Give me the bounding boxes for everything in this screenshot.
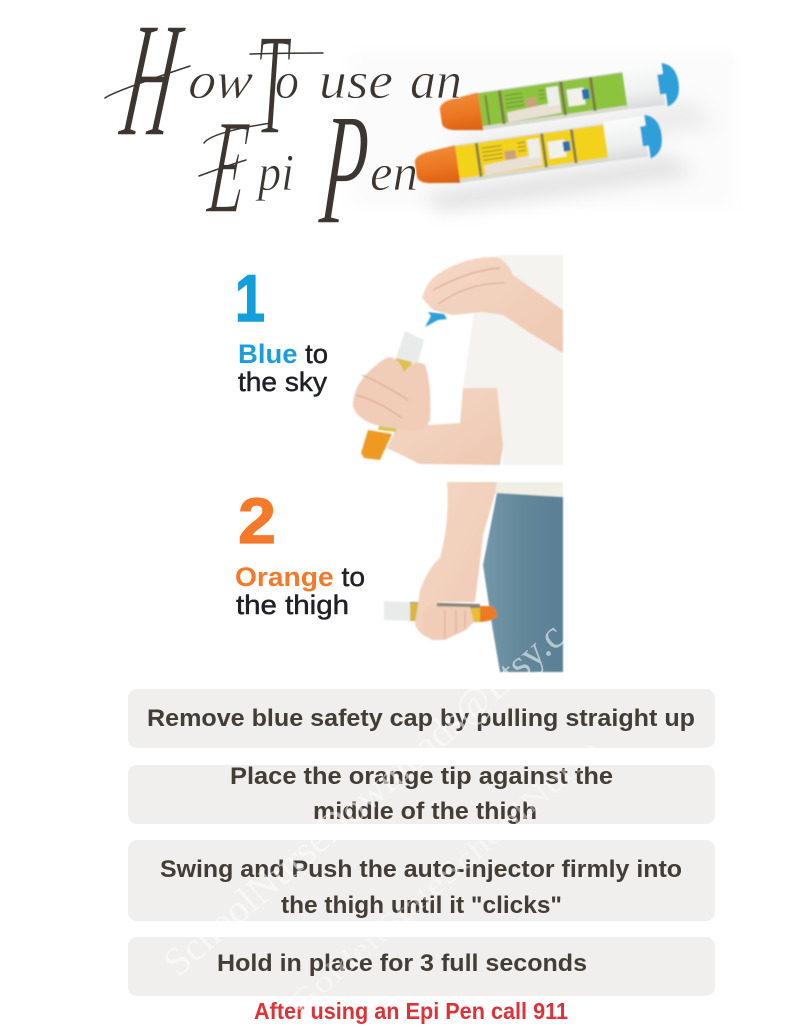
title: T [256,5,292,165]
step box 2 [128,763,715,825]
pen: yellow trainer [413,113,665,192]
title: P [315,80,374,258]
step box 3: the thigh until it "clicks" [281,892,562,919]
watermark: GoldenStateSchoolNurse [283,733,606,1020]
photo: removing the blue cap [353,255,563,465]
callout: call 911: After using an Epi Pen call 911 [254,998,568,1024]
step box 3 [128,840,715,921]
caption: orange to the thigh [235,562,365,620]
step box 4 [128,937,715,996]
step box 3: Swing and Push the auto-injector firmly into [160,856,682,883]
title: an [410,53,462,110]
panel: step 1 blue to the sky [235,255,563,465]
title: use [319,53,393,110]
title: en [370,145,418,202]
caption: orange to the thigh: Orange to [235,562,365,592]
panel: instruction steps [128,689,715,996]
step box 1: Remove blue safety cap by pulling straight up [147,705,695,732]
title: E [202,92,255,242]
step box 2: Place the orange tip against the [230,763,613,790]
title [105,0,462,258]
caption: orange to the thigh: the thigh [236,590,349,620]
pen: green trainer [438,61,682,139]
step box 2: middle of the thigh [313,798,537,825]
step box 1 [128,689,715,748]
caption: blue to the sky [238,339,328,397]
panel: step 2 orange to the thigh [235,482,563,672]
step number 2: 2 [238,485,276,557]
watermark: SchoolNurseDownloads@Etsy.c [154,613,573,985]
photo: two epi pens [350,52,735,212]
step box 4: Hold in place for 3 full seconds [217,950,587,977]
title: pi [254,145,294,202]
step number 1: 1 [235,261,265,335]
title: ow [185,52,257,110]
caption: blue to the sky: the sky [238,367,328,397]
title: o [275,53,299,110]
caption: blue to the sky: Blue to [238,339,328,369]
photo: pen against thigh [384,482,563,672]
